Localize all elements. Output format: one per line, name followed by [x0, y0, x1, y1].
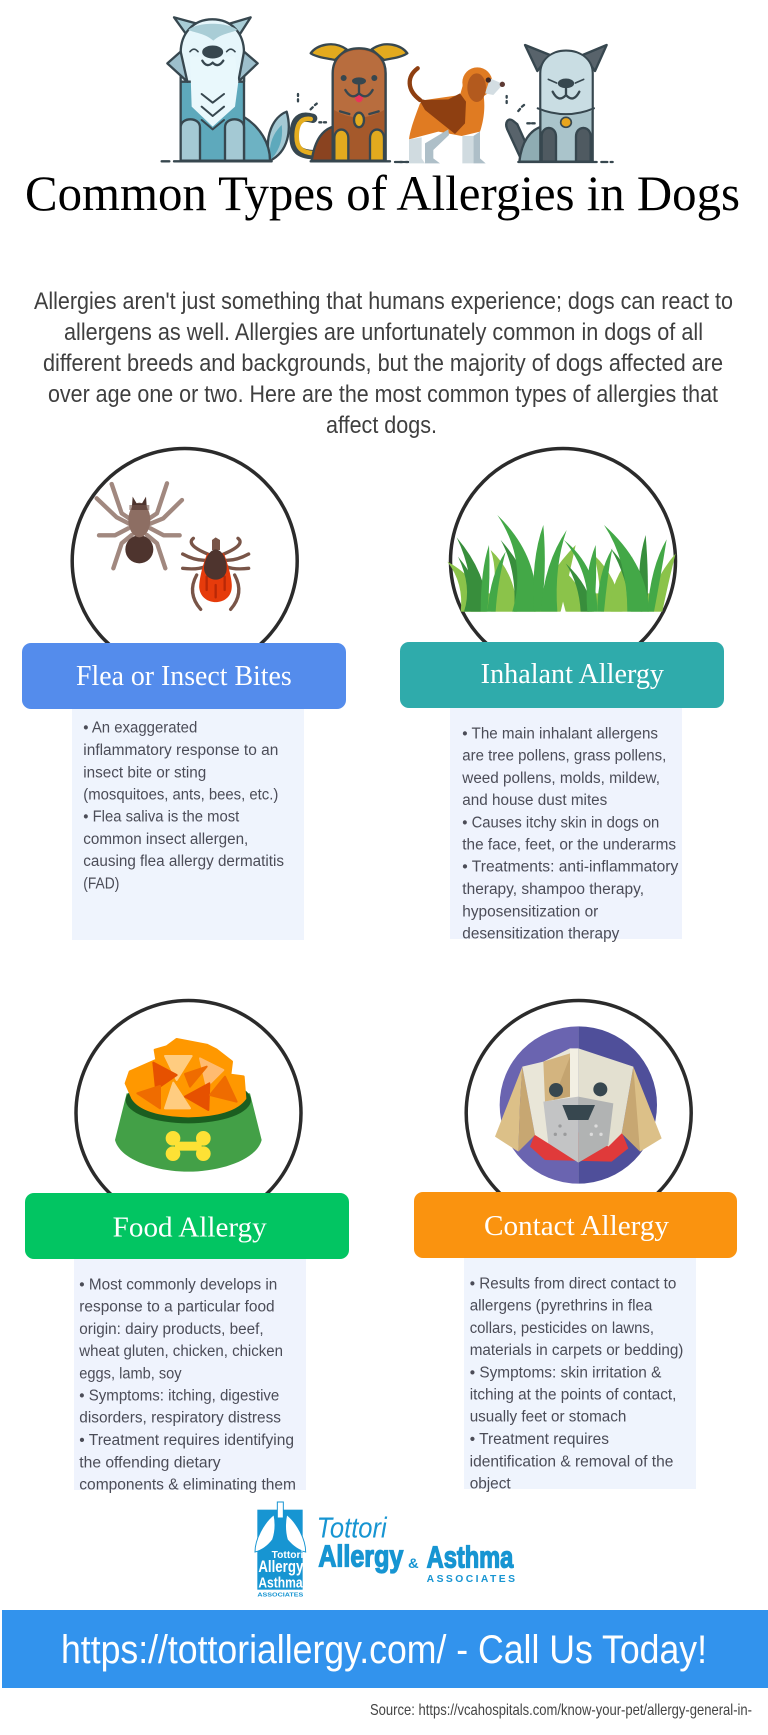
description box: • Treatments: anti-inflammatory	[462, 859, 679, 876]
logo wordmark: Allergy	[318, 1539, 403, 1573]
logo icon: lungs: Tottori	[272, 1550, 304, 1561]
logo wordmark: &	[408, 1555, 419, 1571]
circle frame	[72, 448, 297, 674]
logo wordmark: Tottori	[317, 1512, 388, 1544]
description box: common insect allergen,	[83, 831, 248, 848]
panel: food allergy	[25, 1000, 349, 1493]
description box: • Most commonly develops in	[79, 1276, 277, 1293]
icon: spider and tick	[97, 483, 249, 609]
icon: beagle	[409, 67, 505, 163]
description box: identification & removal of the	[470, 1453, 673, 1470]
description box: allergens (pyrethrins in flea	[470, 1298, 653, 1315]
icon: dog face	[495, 1026, 662, 1184]
description box: components & eliminating them	[79, 1476, 296, 1493]
description box: • Treatment requires identifying	[79, 1432, 294, 1449]
description box: object	[470, 1475, 511, 1492]
intro paragraph	[34, 288, 733, 439]
description box: weed pollens, molds, mildew,	[461, 770, 660, 787]
heading: Contact Allergy	[484, 1211, 669, 1242]
intro paragraph: allergens as well. Allergies are unfortunately common in dogs of all	[64, 319, 703, 346]
icon: grey dog	[400, 45, 613, 162]
description box: (FAD)	[83, 875, 119, 892]
icon: dog food bowl	[115, 1039, 262, 1172]
heading bar	[414, 1192, 737, 1258]
description box: • Results from direct contact to	[470, 1275, 676, 1292]
description box: desensitization therapy	[462, 925, 620, 942]
logo icon: lungs	[255, 1502, 306, 1598]
description box: causing flea allergy dermatitis	[83, 853, 284, 870]
heading bar	[400, 642, 724, 708]
heading bar	[22, 643, 346, 709]
description box: wheat gluten, chicken, chicken	[78, 1343, 283, 1360]
intro paragraph: affect dogs.	[326, 412, 437, 439]
logo icon: lungs: ASSOCIATES	[257, 1592, 304, 1598]
logo wordmark: Asthma	[427, 1540, 514, 1574]
description box: usually feet or stomach	[470, 1409, 626, 1426]
description box: disorders, respiratory distress	[79, 1410, 281, 1427]
description box: the offending dietary	[79, 1454, 221, 1471]
circle frame	[76, 1000, 301, 1226]
description box	[450, 708, 682, 942]
circle frame	[466, 1000, 691, 1226]
logo icon: lungs: Asthma	[258, 1575, 303, 1591]
description box: inflammatory response to an	[83, 742, 278, 759]
logo wordmark	[317, 1512, 515, 1585]
heading: Food Allergy	[113, 1213, 267, 1244]
icon: husky and brown dog	[162, 17, 408, 162]
description box	[464, 1258, 696, 1492]
description box: • Symptoms: skin irritation &	[470, 1364, 662, 1381]
heading: Inhalant Allergy	[481, 659, 664, 690]
call-to-action banner: https://tottoriallergy.com/ - Call Us Today!	[61, 1628, 707, 1672]
heading bar	[25, 1193, 349, 1259]
logo wordmark: ASSOCIATES	[427, 1574, 515, 1585]
icon: grass	[447, 515, 676, 612]
logo icon: lungs: Allergy	[258, 1557, 304, 1576]
heading: Flea or Insect Bites	[76, 661, 292, 692]
illustration: row of dogs	[162, 17, 613, 163]
title: Common Types of Allergies in Dogs	[25, 165, 740, 221]
panel: inhalant allergy	[400, 448, 724, 942]
description box: • Flea saliva is the most	[83, 809, 240, 826]
description box: • An exaggerated	[83, 720, 197, 737]
description box: • The main inhalant allergens	[462, 725, 658, 742]
description box: • Causes itchy skin in dogs on	[462, 814, 659, 831]
description box: materials in carpets or bedding)	[470, 1342, 683, 1359]
panel: flea or insect bites	[22, 448, 346, 940]
description box	[74, 1259, 306, 1493]
description box: • Symptoms: itching, digestive	[79, 1388, 279, 1405]
description box: the face, feet, or the underarms	[462, 837, 676, 854]
description box: (mosquitoes, ants, bees, etc.)	[83, 786, 278, 803]
call-to-action banner	[2, 1610, 768, 1688]
description box: itching at the points of contact,	[470, 1387, 676, 1404]
description box: insect bite or sting	[83, 764, 206, 781]
description box	[72, 709, 304, 940]
description box: are tree pollens, grass pollens,	[462, 748, 666, 765]
brown dog part	[294, 117, 313, 155]
description box: response to a particular food	[79, 1299, 275, 1316]
description box: and house dust mites	[462, 792, 608, 809]
logo: Tottori Allergy & Asthma Associates	[255, 1502, 515, 1598]
panel: contact allergy	[414, 1000, 737, 1492]
description box: hyposensitization or	[462, 903, 598, 920]
description box: collars, pesticides on lawns,	[470, 1320, 654, 1337]
circle frame	[450, 448, 676, 674]
description box: therapy, shampoo therapy,	[462, 881, 644, 898]
description box: origin: dairy products, beef,	[79, 1321, 264, 1338]
description box: eggs, lamb, soy	[79, 1365, 182, 1382]
description box: • Treatment requires	[470, 1431, 609, 1448]
